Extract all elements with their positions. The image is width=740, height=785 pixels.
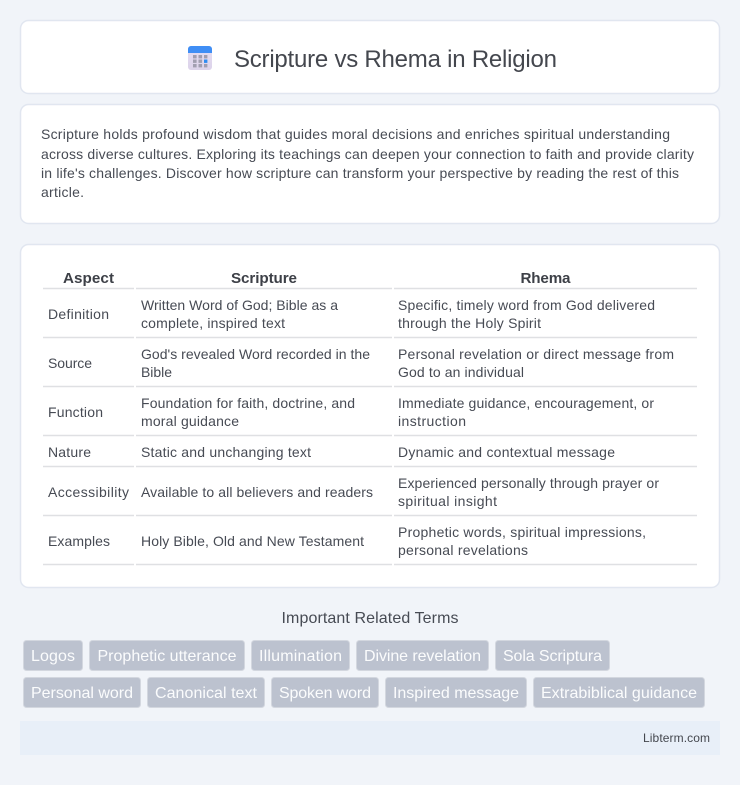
table header row: Aspect [63,270,114,287]
row: Accessibility: spiritual insight [398,493,497,509]
row: Source: God's revealed Word recorded in the [141,346,370,362]
row: Source: Personal revelation or direct message from [398,346,674,362]
table header row: Scripture [231,270,297,287]
row: Definition: complete, inspired text [141,315,285,331]
tag: Illumination: Illumination [259,648,342,665]
tag: Sola Scriptura: Sola Scriptura [503,648,602,665]
tag: Spoken word [272,678,378,708]
table header row: Rhema [520,270,571,287]
title: Scripture vs Rhema in Religion [234,46,557,73]
tag: Canonical text [148,678,264,708]
row: Examples [48,524,646,558]
intro text block: Scripture holds profound wisdom that guides moral decisions and enriches spiritual understanding [41,126,670,142]
row: Source: God to an individual [398,364,524,380]
tag: Logos: Logos [31,648,75,665]
row: Examples: Prophetic words, spiritual impressions, [398,524,646,540]
tag: Inspired message: Inspired message [393,685,519,702]
row: Accessibility [48,475,659,509]
row: Nature: Static and unchanging text [141,444,311,460]
related terms tags [24,640,704,708]
intro text block: across diverse cultures. Exploring its teachings can deepen your connection to faith and provide clarity [41,146,694,162]
row: Accessibility: Experienced personally through prayer or [398,475,659,491]
tag: Prophetic utterance: Prophetic utterance [98,648,237,665]
intro text block: in life's challenges. Discover how scripture can transform your perspective by reading the rest of this [41,165,679,181]
row: Function: moral guidance [141,413,239,429]
panel: introduction [20,104,720,224]
footer bar [20,721,720,755]
row: Function [48,395,654,429]
row: Function: instruction [398,413,466,429]
tag: Sola Scriptura [496,640,610,670]
intro text block: article. [41,184,84,200]
tag: Logos [24,640,82,670]
tag: Divine revelation: Divine revelation [364,648,481,665]
table header row [63,270,571,287]
row: Function: Foundation for faith, doctrine, and [141,395,355,411]
tag: Spoken word: Spoken word [279,685,371,702]
row: Source: Bible [141,364,172,380]
row: Examples: Examples [48,533,110,549]
row: Function: Function [48,404,103,420]
related terms heading: Important Related Terms [282,610,458,627]
row: Accessibility: Accessibility [48,484,129,500]
row: Source: Source [48,355,92,371]
row: Accessibility: Available to all believers and readers [141,484,373,500]
tag: Personal word: Personal word [31,685,133,702]
tag: Personal word [24,678,140,708]
tag: Canonical text: Canonical text [155,685,258,702]
tag: Extrabiblical guidance: Extrabiblical guidance [541,685,697,702]
row: Examples: personal revelations [398,542,528,558]
row: Definition: Specific, timely word from God delivered [398,297,655,313]
row: Source [48,346,674,380]
row: Definition [48,297,655,331]
row: Nature: Dynamic and contextual message [398,444,615,460]
footer credit: Libterm.com [643,731,710,745]
row: Definition: Definition [48,306,109,322]
tag: Divine revelation [356,640,488,670]
tag: Prophetic utterance [90,640,244,670]
row: Definition: through the Holy Spirit [398,315,541,331]
header panel [20,20,720,94]
tag: Inspired message [386,678,526,708]
row: Examples: Holy Bible, Old and New Testament [141,533,364,549]
intro text block [41,126,694,200]
row: Nature: Nature [48,444,91,460]
icon: calendar grid [188,46,212,70]
tag: Extrabiblical guidance [534,678,704,708]
row: Nature [48,444,615,460]
tag: Illumination [252,640,350,670]
row: Definition: Written Word of God; Bible as a [141,297,338,313]
panel: comparison table [20,244,720,588]
row: Function: Immediate guidance, encouragement, or [398,395,654,411]
